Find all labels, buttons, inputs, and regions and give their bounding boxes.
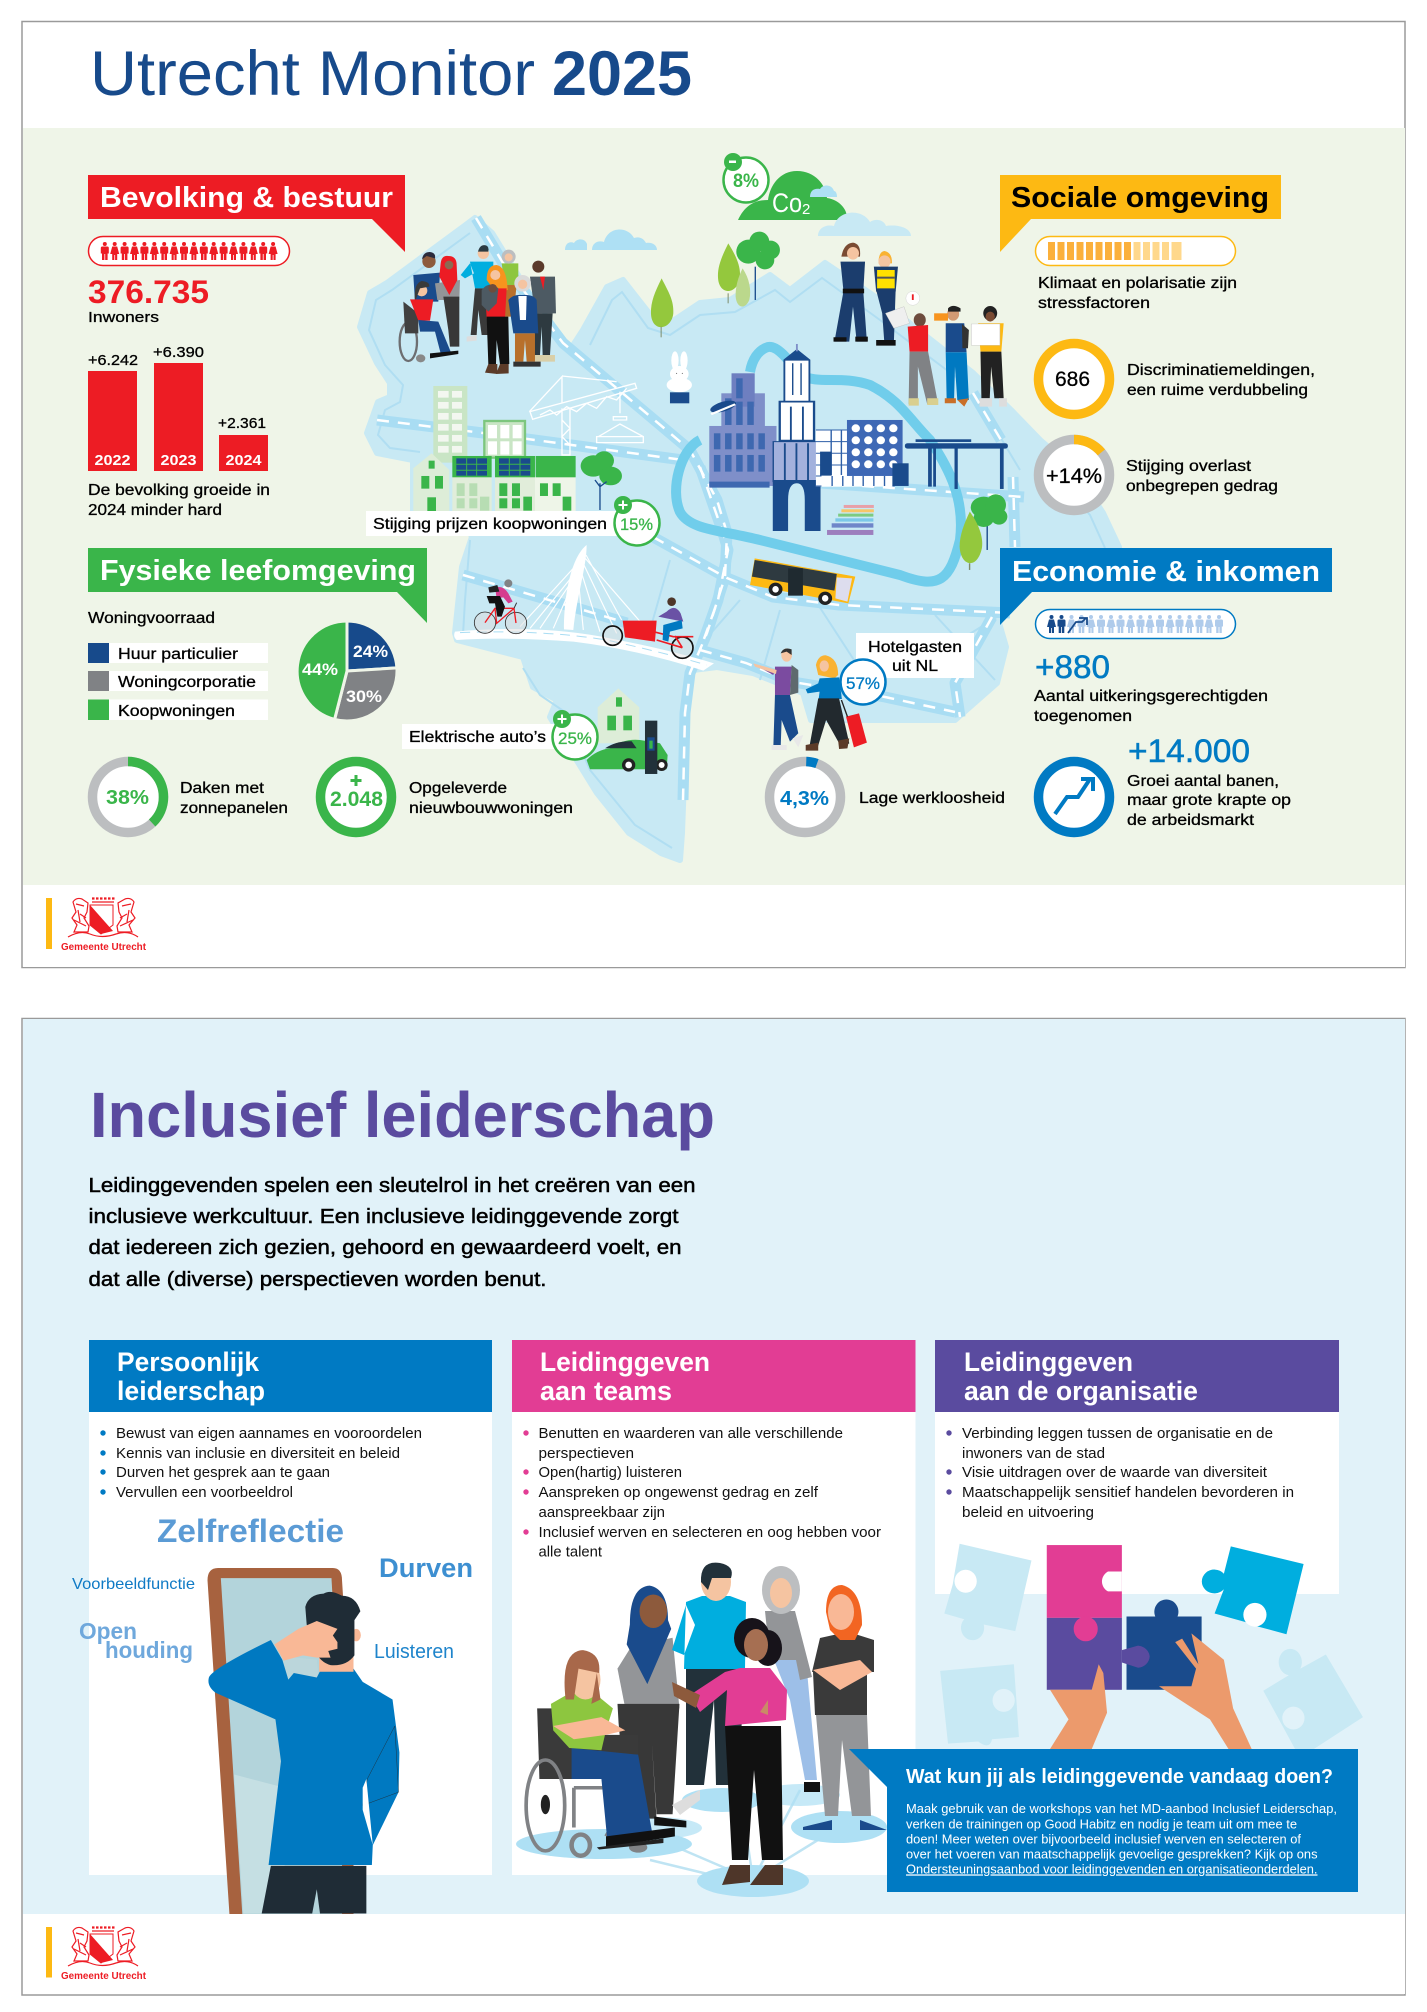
section: Bevolking en bestuur xyxy=(88,175,405,519)
stat: +880: Aantal uitkeringsgerechtigden xyxy=(1034,688,1268,705)
callout: hotel guests: Hotelgasten xyxy=(868,639,962,656)
heading: Sociale omgeving: Sociale omgeving xyxy=(1011,182,1269,214)
bullet list: Durven het gesprek aan te gaan xyxy=(116,1465,330,1481)
bullet list: Aanspreken op ongewenst gedrag en zelf xyxy=(538,1485,819,1501)
illustration: puzzle pieces and hands xyxy=(940,1544,1363,1750)
word cloud: houding xyxy=(105,1637,193,1663)
bullet list: inwoners van de stad xyxy=(962,1446,1105,1462)
stat: discrimination reports: Discriminatiemeldingen, xyxy=(1127,362,1315,379)
callout: Wat kun jij als leidinggevende vandaag doen?: verken de trainingen op Good Habitz en nodig je team uit om mee te xyxy=(906,1817,1297,1831)
icon: CO2 cloud: Co xyxy=(772,188,802,218)
bullet list xyxy=(946,1426,1294,1521)
stat: inhabitants: Inwoners xyxy=(88,309,159,326)
callout: 8% CO2: 8% xyxy=(733,171,759,192)
grey-haired woman xyxy=(762,1566,820,1792)
bar chart: population growth: +6.390 xyxy=(153,344,204,361)
legend: Woningvoorraad: Huur particulier xyxy=(118,646,238,663)
heading: Bevolking & bestuur xyxy=(88,175,405,252)
illustration: bus xyxy=(750,558,855,605)
intro paragraph xyxy=(88,1175,696,1291)
icon: CO2 cloud xyxy=(738,171,847,220)
illustration: man at mirror xyxy=(208,1568,399,1916)
stat: +14.000 jobs: +14.000 xyxy=(1128,733,1250,769)
stat: solar roofs xyxy=(92,762,288,832)
stat: solar roofs: Daken met xyxy=(180,780,265,797)
bullet list: Open(hartig) luisteren xyxy=(538,1465,682,1481)
redheaded woman xyxy=(803,1585,887,1830)
stat: new homes: 2.048 xyxy=(330,788,383,811)
pie chart: housing xyxy=(297,621,397,721)
word cloud xyxy=(72,1513,473,1663)
heading: Fysieke leefomgeving xyxy=(88,548,427,623)
stat: new homes xyxy=(320,762,573,832)
card heading xyxy=(935,1340,1339,1412)
title: 2025 xyxy=(552,39,692,109)
callout: koopwoningen price rise: 15% xyxy=(620,515,653,534)
section: Sociale omgeving xyxy=(1000,175,1315,510)
callout: electric cars: Elektrische auto’s xyxy=(409,729,546,746)
bullet list xyxy=(523,1426,881,1560)
stat: +14.000 jobs: de arbeidsmarkt xyxy=(1127,812,1255,829)
pie chart: housing: 24% xyxy=(353,642,388,661)
card heading: aan de organisatie xyxy=(964,1376,1198,1406)
stat: nuisance increase: +14% xyxy=(1046,465,1102,488)
map of Utrecht xyxy=(360,218,1119,860)
legend: Woningvoorraad: Koopwoningen xyxy=(118,703,235,720)
text: stress factors: Klimaat en polarisatie zijn xyxy=(1038,275,1237,292)
bar chart: population growth: 2023 xyxy=(160,452,196,469)
bullet list: alle talent xyxy=(538,1544,602,1560)
word cloud: Luisteren xyxy=(374,1641,454,1663)
card heading: leiderschap xyxy=(117,1376,265,1406)
bar chart: population growth: 2022 xyxy=(94,452,130,469)
word cloud: Open xyxy=(79,1618,137,1644)
text: growth note xyxy=(88,482,270,519)
title: Utrecht Monitor xyxy=(90,39,535,109)
heading: Economie & inkomen xyxy=(1000,548,1332,625)
illustration: police and protesters xyxy=(834,243,1007,407)
callout: electric cars xyxy=(402,710,598,760)
heading: Bevolking & bestuur: Bevolking & bestuur xyxy=(100,182,393,214)
bullet list: Visie uitdragen over de waarde van diversiteit xyxy=(962,1465,1267,1481)
card: Leidinggeven aan de organisatie xyxy=(935,1340,1339,1594)
bullet list: Kennis van inclusie en diversiteit en beleid xyxy=(116,1446,400,1462)
callout: 8% CO2 xyxy=(724,153,768,202)
callout: hotel guests: uit NL xyxy=(892,658,938,675)
card: Persoonlijk leiderschap xyxy=(72,1340,492,1916)
card: Leidinggeven aan teams xyxy=(512,1340,916,1875)
bullet list: Benutten en waarderen van alle verschillende xyxy=(538,1426,843,1442)
bullet list: Verbinding leggen tussen de organisatie en de xyxy=(962,1426,1273,1442)
seated woman xyxy=(572,1748,653,1836)
card heading: Leidinggeven xyxy=(964,1347,1133,1377)
woman in pink blouse xyxy=(672,1618,787,1885)
illustration: house and electric car xyxy=(587,688,668,774)
word cloud: Voorbeeldfunctie xyxy=(72,1576,195,1593)
cloud xyxy=(818,213,911,236)
callout: Wat kun jij als leidinggevende vandaag doen?: over het voeren van maatschappelijk gevoelige gesprekken? Kijk op ons xyxy=(906,1847,1318,1861)
callout: Wat kun jij als leidinggevende vandaag doen? xyxy=(849,1749,1358,1892)
section: Fysieke leefomgeving xyxy=(88,496,660,832)
footer: Gemeente Utrecht logo xyxy=(23,885,1405,967)
stat: solar roofs: zonnepanelen xyxy=(180,800,288,817)
callout: koopwoningen price rise xyxy=(366,496,660,546)
stat: +880 xyxy=(1034,649,1268,725)
footer: Gemeente Utrecht logo: Gemeente Utrecht xyxy=(61,942,147,953)
bullet list: Vervullen een voorbeeldrol xyxy=(116,1485,293,1501)
bullet list: perspectieven xyxy=(538,1446,634,1462)
illustration: trees and Miffy xyxy=(651,232,780,403)
callout: Wat kun jij als leidinggevende vandaag doen?: Maak gebruik van de workshops van het MD-aanbod Inclusief Leiderschap, xyxy=(906,1802,1337,1816)
illustration: trees near river xyxy=(960,494,1007,570)
bar chart: population growth: +6.242 xyxy=(88,352,138,369)
stat: discrimination reports xyxy=(1038,344,1315,414)
stat: inhabitants xyxy=(88,274,209,326)
bullet list: Maatschappelijk sensitief handelen bevorderen in xyxy=(962,1485,1294,1501)
wheelchair xyxy=(537,1708,569,1779)
icon: benefit recipients pill xyxy=(1036,610,1236,638)
callout: koopwoningen price rise: Stijging prijzen koopwoningen xyxy=(373,516,607,533)
river xyxy=(676,347,961,582)
illustration: Utrecht city centre with Dom tower xyxy=(708,344,1008,535)
cloud xyxy=(565,229,657,250)
footer: Gemeente Utrecht logo xyxy=(23,1914,1405,1994)
heading: Economie & inkomen: Economie & inkomen xyxy=(1012,556,1320,588)
text: growth note: 2024 minder hard xyxy=(88,502,222,519)
icon: CO2 cloud: 2 xyxy=(802,201,810,218)
intro paragraph: dat iedereen zich gezien, gehoord en gewaardeerd voelt, en xyxy=(88,1237,682,1259)
stat: +14.000 jobs: maar grote krapte op xyxy=(1127,792,1291,809)
bullet list: aanspreekbaar zijn xyxy=(538,1505,665,1521)
illustration: group of residents xyxy=(400,245,556,374)
illustration: tourists xyxy=(753,648,867,751)
stat: nuisance increase xyxy=(1038,440,1278,510)
callout: hotel guests: 57% xyxy=(846,674,880,693)
callout: Wat kun jij als leidinggevende vandaag doen?: doen! Meer weten over bijvoorbeeld inclusief werven en selecteren of xyxy=(906,1832,1302,1846)
bullet list: Bewust van eigen aannames en vooroordelen xyxy=(116,1426,422,1442)
bullet list: beleid en uitvoering xyxy=(962,1505,1094,1521)
bar chart: population growth: 2024 xyxy=(226,452,262,469)
bullet list xyxy=(100,1426,422,1501)
man in blue shirt xyxy=(672,1563,746,1815)
legend: Woningvoorraad: Woningcorporatie xyxy=(118,674,256,691)
icon: stress meter xyxy=(1036,236,1236,266)
panel: Utrecht Monitor xyxy=(22,22,1405,968)
stat: unemployment xyxy=(768,760,1005,834)
stat: unemployment: 4,3% xyxy=(780,788,829,810)
intro paragraph: dat alle (diverse) perspectieven worden benut. xyxy=(88,1269,546,1291)
stat: nuisance increase: onbegrepen gedrag xyxy=(1126,478,1278,495)
text: stress factors xyxy=(1038,275,1237,312)
heading: Inclusief leiderschap: Inclusief leiderschap xyxy=(90,1079,715,1151)
illustration: Erasmus-style bridge with cyclists xyxy=(454,545,714,671)
callout: Wat kun jij als leidinggevende vandaag doen?: Ondersteuningsaanbod voor leidinggevenden en organisatieonderdelen. xyxy=(906,1862,1318,1876)
stat: new homes: Opgeleverde xyxy=(409,780,507,797)
card heading: Leidinggeven xyxy=(540,1347,710,1377)
hijab woman xyxy=(617,1638,679,1708)
card heading: Persoonlijk xyxy=(117,1347,260,1377)
stat: new homes: nieuwbouwwoningen xyxy=(409,800,573,817)
stat: +14.000 jobs xyxy=(1038,733,1291,832)
heading: Fysieke leefomgeving: Fysieke leefomgeving xyxy=(100,555,416,587)
stat: solar roofs: 38% xyxy=(106,787,149,809)
illustration: housing and crane xyxy=(413,376,643,513)
card heading: aan teams xyxy=(540,1376,672,1406)
pie chart: housing: 30% xyxy=(346,687,382,706)
stat: inhabitants: 376.735 xyxy=(88,274,209,310)
heading: Sociale omgeving xyxy=(1000,175,1281,252)
panel: Inclusief leiderschap xyxy=(22,1018,1405,1995)
green background xyxy=(23,128,1405,885)
bullet list: Inclusief werven en selecteren en oog hebben voor xyxy=(538,1525,881,1541)
intro paragraph: Leidinggevenden spelen een sleutelrol in het creëren van een xyxy=(88,1175,696,1197)
stat: +880: toegenomen xyxy=(1034,708,1132,725)
word cloud: Durven xyxy=(379,1553,473,1583)
word cloud: Zelfreflectie xyxy=(157,1513,344,1549)
text: stress factors: stressfactoren xyxy=(1038,295,1150,312)
bar chart: population growth: +2.361 xyxy=(218,415,266,432)
pie chart: housing: 44% xyxy=(302,660,338,679)
stat: +14.000 jobs: Groei aantal banen, xyxy=(1127,773,1279,790)
footer: Gemeente Utrecht logo: Gemeente Utrecht xyxy=(61,1971,147,1982)
text: growth note: De bevolking groeide in xyxy=(88,482,270,499)
stat: +880: +880 xyxy=(1035,649,1110,685)
card heading xyxy=(512,1340,916,1412)
section: Economie en inkomen xyxy=(768,548,1332,834)
stat: unemployment: Lage werkloosheid xyxy=(859,790,1005,807)
icon: population pill xyxy=(88,236,290,266)
legend: Woningvoorraad: Woningvoorraad xyxy=(88,610,215,627)
callout: electric cars: 25% xyxy=(558,729,592,748)
illustration: team of leaders xyxy=(516,1563,887,1897)
bar chart: population growth xyxy=(88,344,268,471)
card heading xyxy=(89,1340,492,1412)
callout: Wat kun jij als leidinggevende vandaag doen?: Wat kun jij als leidinggevende vandaag doen? xyxy=(906,1766,1333,1788)
legend: Woningvoorraad xyxy=(88,610,268,720)
callout: hotel guests xyxy=(840,633,974,704)
intro paragraph: inclusieve werkcultuur. Een inclusieve leidinggevende zorgt xyxy=(88,1206,679,1228)
stat: nuisance increase: Stijging overlast xyxy=(1126,458,1252,475)
stat: discrimination reports: een ruime verdubbeling xyxy=(1127,382,1308,399)
stat: discrimination reports: 686 xyxy=(1055,368,1090,391)
